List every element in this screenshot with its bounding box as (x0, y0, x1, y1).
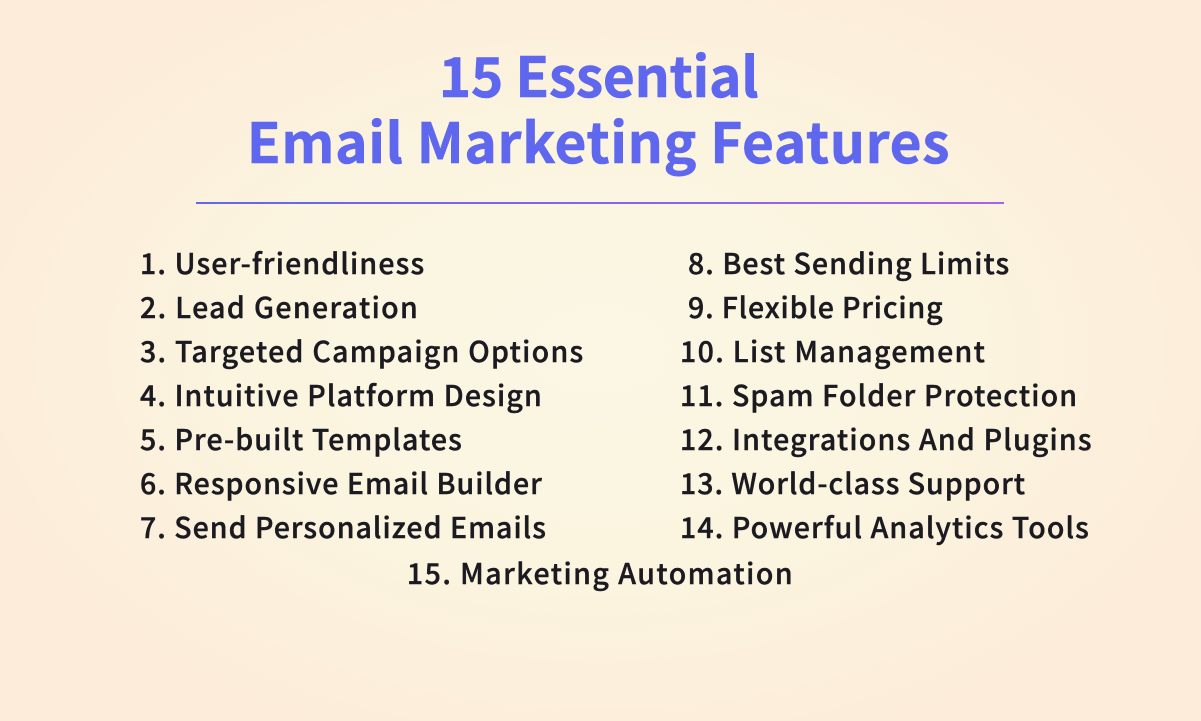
item 1: 1. User-friendliness (140, 242, 425, 283)
item 2: 2. Lead Generation (140, 286, 419, 327)
item 5: 5. Pre-built Templates (140, 418, 463, 459)
item 9: 9. Flexible Pricing (688, 286, 943, 327)
item 4: 4. Intuitive Platform Design (140, 374, 543, 415)
item 3: 3. Targeted Campaign Options (140, 330, 584, 371)
item 13: 13. World-class Support (680, 462, 1026, 503)
title: 15 Essential (439, 33, 758, 113)
left feature list (140, 242, 584, 547)
right feature list (680, 242, 1093, 547)
item 11: 11. Spam Folder Protection (680, 374, 1078, 415)
item 10: 10. List Management (680, 330, 986, 371)
item 14: 14. Powerful Analytics Tools (680, 506, 1090, 547)
item 15: 15. Marketing Automation (407, 552, 794, 593)
item 6: 6. Responsive Email Builder (140, 462, 543, 503)
title (247, 33, 950, 179)
item 7: 7. Send Personalized Emails (140, 506, 547, 547)
item 12: 12. Integrations And Plugins (680, 418, 1093, 459)
item 8: 8. Best Sending Limits (688, 242, 1010, 283)
divider line (196, 202, 1004, 204)
title: Email Marketing Features (247, 99, 950, 179)
